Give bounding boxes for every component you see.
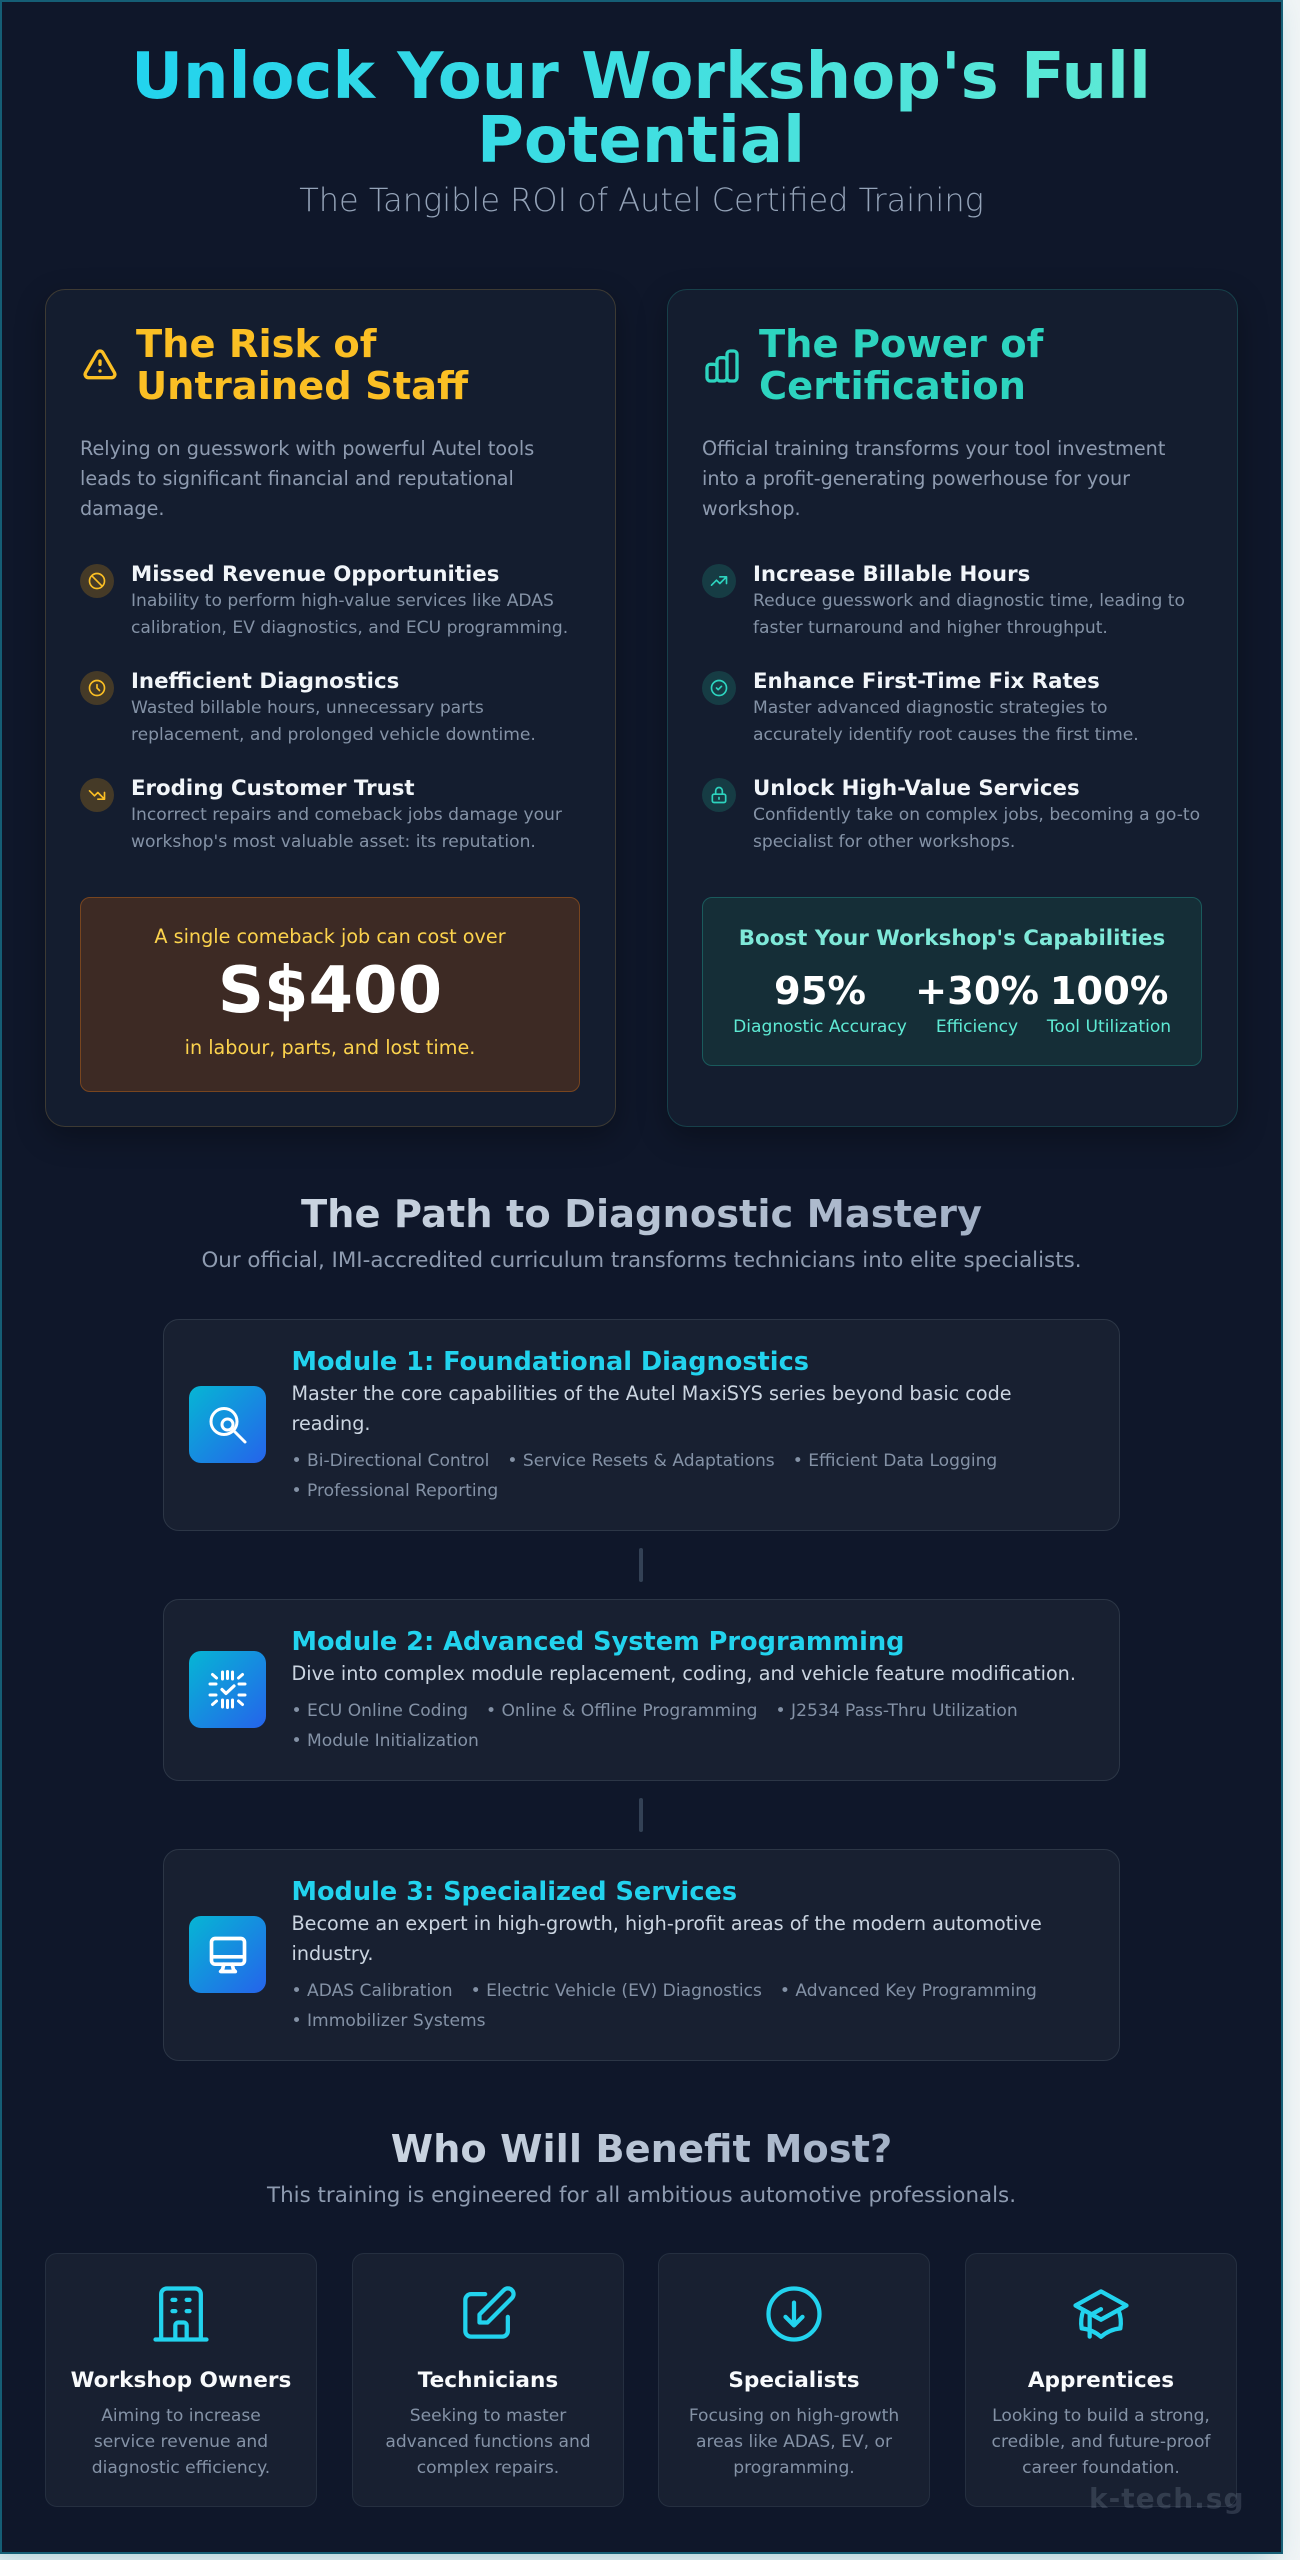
item: billable hours [702, 562, 1185, 638]
icon: warning triangle [83, 349, 117, 380]
module 1 description [292, 1382, 1012, 1435]
intro text: risk: Relying on guesswork with powerful Autel tools [80, 437, 534, 460]
item: high-value services: Unlock High-Value Services [753, 776, 1080, 801]
item: inefficient diagnostics: Wasted billable hours, unnecessary parts [131, 698, 484, 718]
item: missed revenue [80, 562, 568, 638]
icon: trending up [702, 564, 736, 598]
icon: lock [702, 778, 736, 812]
item: missed revenue: Missed Revenue Opportunities [131, 562, 499, 587]
title: Potential [477, 104, 805, 178]
module 2 description: Dive into complex module replacement, coding, and vehicle feature modification. [292, 1662, 1076, 1685]
module 1 description: Master the core capabilities of the Autel MaxiSYS series beyond basic code [292, 1382, 1012, 1405]
icon: graduation cap [1073, 2289, 1129, 2339]
intro text: risk [80, 437, 534, 520]
connector 2 [639, 1798, 643, 1832]
module 3 title: Module 3: Specialized Services [292, 1877, 737, 1907]
watermark: k-tech.sg [1089, 2482, 1244, 2515]
item: first-time fix: accurately identify root causes the first time. [753, 724, 1139, 744]
card: apprentices: career foundation. [1022, 2458, 1180, 2478]
intro text: power [702, 437, 1165, 520]
stat: efficiency: Efficiency [936, 1017, 1018, 1037]
stat: accuracy: 95% [774, 969, 866, 1014]
intro text: risk: leads to significant financial and reputational [80, 467, 514, 490]
icon: bar chart [705, 349, 739, 383]
module 3 topics: • Immobilizer Systems [292, 2011, 486, 2031]
item: billable hours: Reduce guesswork and diagnostic time, leading to [753, 591, 1185, 611]
card: workshop owners: Workshop Owners [71, 2368, 291, 2393]
stat: efficiency [915, 969, 1039, 1037]
stat: utilization: 100% [1050, 969, 1168, 1014]
intro text: power: Official training transforms your tool investment [702, 437, 1165, 460]
card: workshop owners: Aiming to increase [101, 2406, 261, 2426]
card: technicians: complex repairs. [417, 2458, 559, 2478]
heading: risk [136, 322, 468, 409]
module 3 card [163, 1849, 1120, 2061]
heading: power: Certification [759, 364, 1026, 409]
icon: ban [80, 564, 114, 598]
icon: trending down [80, 778, 114, 812]
heading: who will benefit: Who Will Benefit Most? [391, 2127, 892, 2172]
item: inefficient diagnostics [80, 669, 536, 744]
card: technicians: advanced functions and [385, 2432, 591, 2452]
item: missed revenue: Inability to perform high-value services like ADAS [131, 591, 554, 611]
big number: S$400 [218, 954, 442, 1028]
icon: check circle [702, 671, 736, 705]
intro text: power: workshop. [702, 497, 801, 520]
module 2 card [163, 1599, 1120, 1781]
heading: risk: Untrained Staff [136, 364, 468, 409]
module 1 title: Module 1: Foundational Diagnostics [292, 1347, 809, 1377]
stat: utilization [1046, 969, 1171, 1037]
icon: check badge [189, 1651, 266, 1728]
card: apprentices: credible, and future-proof [992, 2432, 1210, 2452]
item: eroding trust: Incorrect repairs and comeback jobs damage your [131, 805, 562, 825]
card: workshop owners: diagnostic efficiency. [92, 2458, 270, 2478]
module 2 topics [292, 1701, 1018, 1751]
card: technicians: Seeking to master [410, 2406, 566, 2426]
intro text: risk: damage. [80, 497, 164, 520]
card: apprentices [965, 2253, 1237, 2507]
card: workshop owners [45, 2253, 317, 2507]
module 3 topics [292, 1981, 1037, 2031]
item: inefficient diagnostics: Inefficient Diagnostics [131, 669, 399, 694]
heading: power [759, 322, 1044, 409]
card: workshop owners: service revenue and [94, 2432, 268, 2452]
stat: efficiency: +30% [915, 969, 1039, 1014]
card: technicians: Technicians [418, 2368, 558, 2393]
callout: capability stats [702, 897, 1202, 1066]
heading: risk: The Risk of [136, 322, 376, 367]
item: eroding trust [80, 776, 562, 852]
stat: accuracy: Diagnostic Accuracy [733, 1017, 907, 1037]
card: specialists [658, 2253, 930, 2507]
card: apprentices: Apprentices [1028, 2368, 1174, 2393]
callout: cost of comeback: in labour, parts, and lost time. [185, 1036, 475, 1059]
item: billable hours: faster turnaround and higher throughput. [753, 618, 1108, 638]
card: specialists: Specialists [728, 2368, 860, 2393]
callout: cost of comeback [80, 897, 580, 1092]
card: apprentices: Looking to build a strong, [992, 2406, 1210, 2426]
module 1 topics [292, 1451, 997, 1501]
item: inefficient diagnostics: replacement, and prolonged vehicle downtime. [131, 724, 536, 744]
item: high-value services: specialist for other workshops. [753, 832, 1015, 852]
panel: the risk of untrained staff [45, 289, 616, 1127]
module 1 description: reading. [292, 1412, 370, 1435]
item: high-value services [702, 776, 1200, 852]
item: first-time fix: Master advanced diagnostic strategies to [753, 698, 1107, 718]
module 1 topics: • Professional Reporting [292, 1481, 498, 1501]
module 3 topics: • ADAS Calibration • Electric Vehicle (EV) Diagnostics • Advanced Key Programming [292, 1981, 1037, 2001]
card: specialists: Focusing on high-growth [689, 2406, 899, 2426]
subtitle: The Tangible ROI of Autel Certified Training [299, 181, 984, 219]
icon: monitor [189, 1916, 266, 1993]
title: Unlock Your Workshop's Full [131, 40, 1151, 114]
card: specialists: programming. [733, 2458, 855, 2478]
module 1 topics: • Bi-Directional Control • Service Resets & Adaptations • Efficient Data Logging [292, 1451, 997, 1471]
item: eroding trust: Eroding Customer Trust [131, 776, 415, 801]
item: billable hours: Increase Billable Hours [753, 562, 1030, 587]
module 1 card [163, 1319, 1120, 1531]
icon: pencil [463, 2286, 516, 2339]
icon: building [153, 2286, 209, 2342]
subheading: who: This training is engineered for all ambitious automotive professionals. [267, 2183, 1016, 2208]
heading: path to mastery: The Path to Diagnostic Mastery [301, 1192, 982, 1237]
panel: the power of certification [667, 289, 1238, 1127]
module 3 description [292, 1912, 1042, 1965]
item: missed revenue: calibration, EV diagnostics, and ECU programming. [131, 618, 568, 638]
module 3 description: Become an expert in high-growth, high-profit areas of the modern automotive [292, 1912, 1042, 1935]
item: high-value services: Confidently take on complex jobs, becoming a go-to [753, 805, 1200, 825]
module 2 topics: • Module Initialization [292, 1731, 479, 1751]
module 2 topics: • ECU Online Coding • Online & Offline Programming • J2534 Pass-Thru Utilization [292, 1701, 1018, 1721]
title [129, 45, 1153, 173]
heading: power: The Power of [759, 322, 1043, 367]
subheading: path: Our official, IMI-accredited curriculum transforms technicians into elite specialists. [201, 1248, 1082, 1273]
callout: capability stats: Boost Your Workshop's Capabilities [739, 926, 1165, 951]
item: first-time fix [702, 669, 1139, 744]
icon: arrow circle down [766, 2286, 822, 2342]
icon: clock [80, 671, 114, 705]
callout: cost of comeback: A single comeback job can cost over [154, 925, 506, 948]
module 2 title: Module 2: Advanced System Programming [292, 1627, 905, 1657]
stat: accuracy [733, 969, 907, 1037]
card: specialists: areas like ADAS, EV, or [696, 2432, 892, 2452]
item: first-time fix: Enhance First-Time Fix Rates [753, 669, 1100, 694]
intro text: power: into a profit-generating powerhouse for your [702, 467, 1130, 490]
item: eroding trust: workshop's most valuable asset: its reputation. [131, 832, 536, 852]
stat: utilization: Tool Utilization [1047, 1017, 1171, 1037]
module 3 description: industry. [292, 1942, 373, 1965]
connector 1 [639, 1548, 643, 1582]
icon: magnifier [189, 1386, 266, 1463]
card: technicians [352, 2253, 624, 2507]
